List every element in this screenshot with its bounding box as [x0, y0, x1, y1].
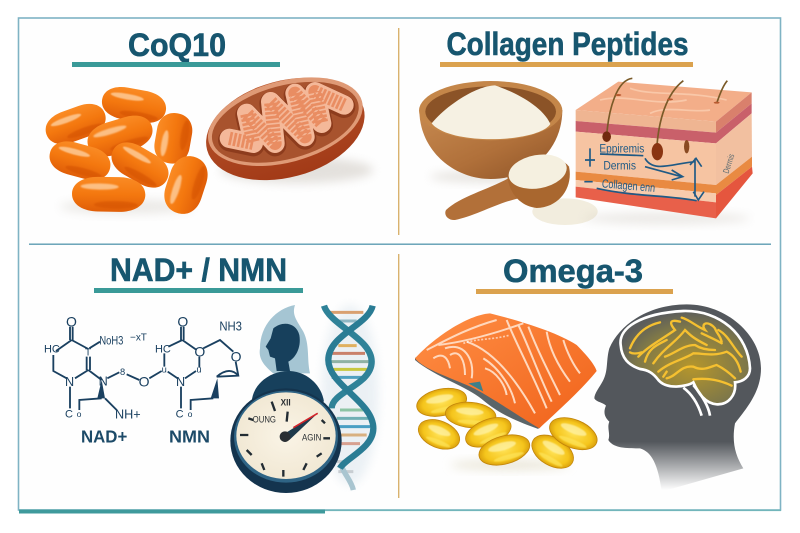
diagram: NAD+ and NMN chemical structures: N	[99, 374, 108, 388]
label: NMN: NMN	[169, 427, 210, 447]
icon: wooden bowl of collagen powder	[419, 81, 562, 183]
skin layer labels: Dermis	[721, 152, 737, 175]
diagram: NAD+ and NMN chemical structures: O	[139, 374, 150, 390]
panel: CoQ10	[41, 27, 376, 219]
diagram: NAD+ and NMN chemical structures: O	[231, 348, 242, 364]
panel: Omega-3	[414, 253, 761, 492]
skin layer labels	[599, 141, 737, 195]
diagram: NAD+ and NMN chemical structures	[44, 313, 242, 447]
diagram: NAD+ and NMN chemical structures: NH3	[219, 319, 242, 333]
diagram: NAD+ and NMN chemical structures: N	[176, 375, 185, 389]
brain outline and glow	[620, 311, 750, 404]
icon: aging clock gauge: XII	[281, 398, 291, 408]
icon: wooden scoop with powder	[445, 150, 598, 225]
icon: head silhouette with glowing brain	[594, 304, 761, 492]
icon: orange softgel capsules	[41, 84, 213, 219]
icon: yellow omega-3 softgels	[414, 384, 602, 475]
label: NAD+: NAD+	[81, 427, 127, 447]
brain stem	[683, 385, 710, 416]
diagram: NAD+ and NMN chemical structures: C	[65, 409, 73, 421]
heading: NAD+ / NMN: NAD+ / NMN	[110, 252, 287, 288]
diagram: NAD+ and NMN chemical structures: −xT	[130, 333, 147, 344]
diagram: NAD+ and NMN chemical structures: 8	[120, 367, 125, 377]
diagram: NAD+ and NMN chemical structures: u	[196, 365, 202, 375]
skin layer labels: Dermis	[603, 158, 636, 172]
diagram: NAD+ and NMN chemical structures: N	[65, 375, 74, 389]
icon: aging clock gauge: OUNG	[253, 415, 276, 425]
diagram: NAD+ and NMN chemical structures: u	[162, 365, 167, 375]
diagram: NAD+ and NMN chemical structures: o	[188, 409, 193, 419]
panel: NAD+ / NMN	[44, 252, 378, 493]
diagram: NAD+ and NMN chemical structures: O	[177, 313, 188, 329]
icon: person silhouette	[252, 305, 324, 402]
diagram: NAD+ and NMN chemical structures: HC	[44, 343, 60, 355]
skin layer labels: Collagen enn	[601, 176, 656, 195]
heading: Collagen Peptides: Collagen Peptides	[446, 26, 688, 62]
skin layer labels: Eppiremis	[599, 141, 644, 155]
heading: Omega-3: Omega-3	[503, 253, 643, 289]
icon: salmon fillet	[415, 313, 597, 429]
diagram: NAD+ and NMN chemical structures: o	[77, 409, 82, 419]
diagram: NAD+ and NMN chemical structures: NH+	[115, 407, 141, 421]
diagram: NAD+ and NMN chemical structures: C	[176, 409, 184, 421]
skin hairs and follicles	[602, 78, 727, 160]
heading underline	[72, 62, 280, 67]
icon: DNA double helix	[322, 305, 378, 490]
icon: skin cross-section block	[576, 78, 753, 224]
icon: aging clock gauge: AGIN	[302, 432, 321, 442]
panel: Collagen Peptides	[419, 26, 753, 225]
icon: mitochondrion cross-section	[195, 61, 376, 197]
icon: aging clock gauge	[230, 388, 342, 493]
brain folds	[630, 318, 742, 386]
diagram: NAD+ and NMN chemical structures: O	[194, 343, 205, 359]
heading underline	[440, 62, 693, 67]
skin annotation arrows	[584, 148, 704, 201]
heading underline	[476, 289, 673, 294]
diagram: NAD+ and NMN chemical structures: O	[66, 313, 77, 329]
diagram: NAD+ and NMN chemical structures: HC	[155, 343, 171, 355]
diagram: NAD+ and NMN chemical structures: NoH3	[99, 333, 124, 347]
heading: CoQ10: CoQ10	[128, 27, 226, 63]
heading underline	[94, 288, 303, 293]
diagram: NAD+ and NMN chemical structures: T	[85, 348, 91, 359]
